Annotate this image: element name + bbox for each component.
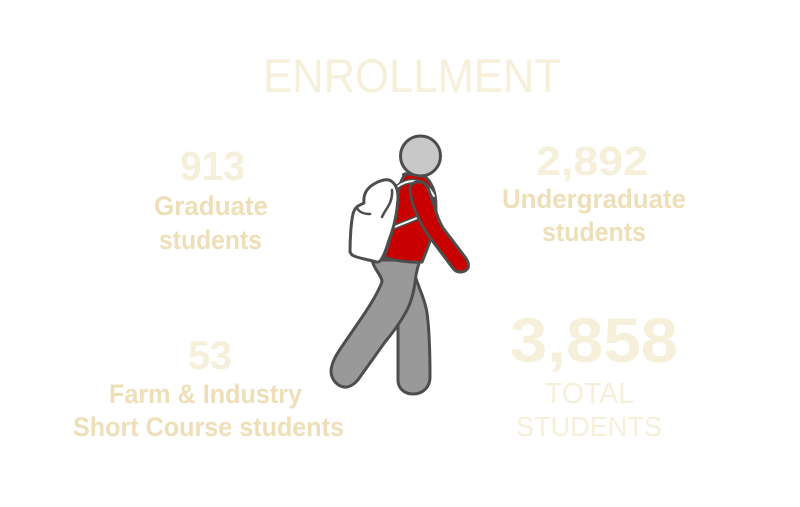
stat: total students: STUDENTS bbox=[516, 411, 662, 442]
stat: total students: 3,858 bbox=[510, 306, 678, 376]
head bbox=[400, 136, 440, 176]
arm bbox=[410, 182, 468, 272]
stat: graduate students: Graduate bbox=[154, 191, 268, 221]
stat: graduate students bbox=[154, 143, 268, 255]
stat: graduate students: students bbox=[159, 225, 262, 255]
stat: undergraduate students bbox=[502, 138, 686, 247]
backpack bbox=[350, 180, 398, 262]
backpack flap details bbox=[357, 190, 392, 217]
stat: undergraduate students: 2,892 bbox=[536, 138, 648, 184]
stat: total students bbox=[510, 306, 678, 442]
front leg bbox=[331, 260, 420, 387]
back leg bbox=[398, 272, 430, 394]
torso bbox=[384, 174, 436, 262]
stat: undergraduate students: students bbox=[542, 217, 646, 247]
shoulder strap bbox=[397, 181, 434, 196]
stat: total students: TOTAL bbox=[545, 378, 634, 410]
stat: farm and industry short course students bbox=[73, 334, 344, 442]
stat: farm and industry short course students: Farm & Industry bbox=[109, 379, 302, 409]
stat: farm and industry short course students: 53 bbox=[188, 334, 232, 378]
stat: undergraduate students: Undergraduate bbox=[502, 184, 686, 214]
icon: walking student with backpack bbox=[331, 136, 468, 394]
title: ENROLLMENT bbox=[263, 49, 561, 102]
stat: graduate students: 913 bbox=[180, 143, 245, 189]
stat: farm and industry short course students: Short Course students bbox=[73, 412, 344, 442]
